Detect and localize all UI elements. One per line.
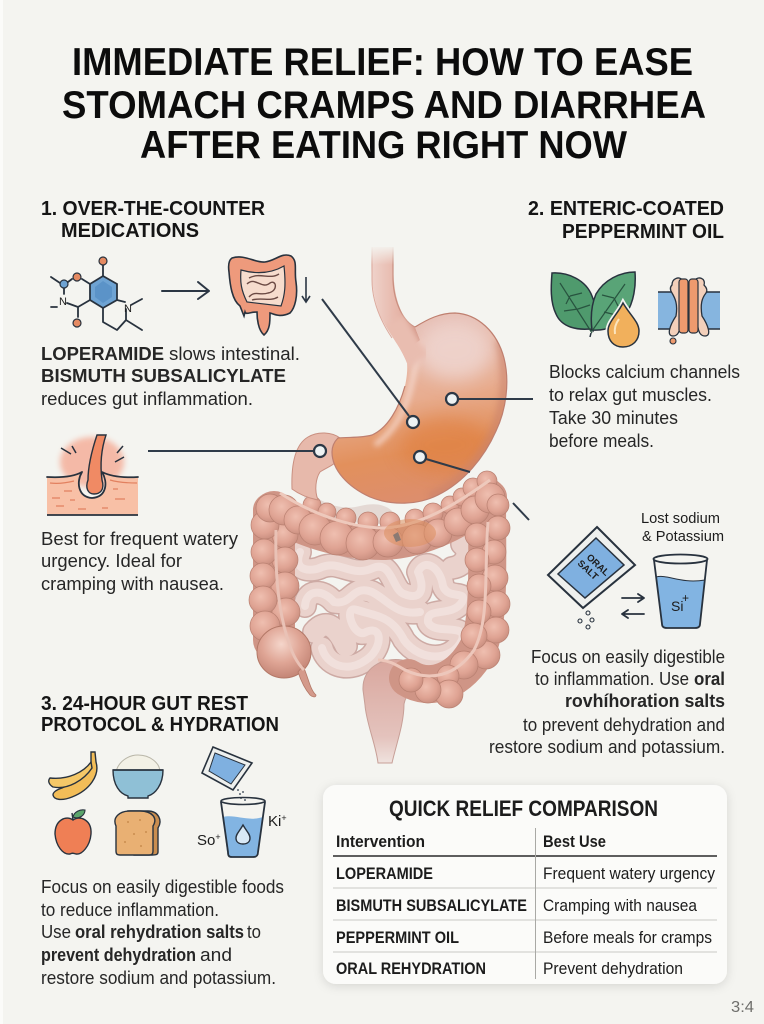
icon: water glass with ions [197, 798, 287, 857]
description: BISMUTH SUBSALICYLATE [41, 365, 286, 386]
panel: over-the-counter medications [41, 197, 310, 594]
icon: water glass with ions: + [281, 813, 287, 823]
description: rovhíhoration salts [565, 690, 725, 711]
icon: molecule: N [59, 296, 67, 308]
label: lost electrolytes: & Potassium [642, 528, 724, 545]
description: reduces gut inflammation. [41, 388, 253, 409]
label: lost electrolytes: Lost sodium [641, 510, 720, 527]
description: Focus on easily digestible foods [41, 876, 284, 897]
table header: Best Use [543, 832, 606, 851]
icon: bread [115, 811, 160, 855]
arrow [162, 282, 209, 299]
duodenum and stomach [292, 245, 507, 503]
description [41, 343, 300, 409]
rectum [363, 660, 432, 763]
label: lost electrolytes [641, 510, 724, 545]
description [489, 646, 725, 757]
table rows: PEPPERMINT OIL [336, 928, 459, 947]
description: restore sodium and potassium. [489, 736, 725, 757]
description: to prevent dehydration and [523, 714, 725, 735]
title: STOMACH CRAMPS AND DIARRHEA [62, 84, 706, 127]
usage text: urgency. Ideal for [41, 550, 182, 571]
table header [336, 832, 606, 851]
title: IMMEDIATE RELIEF: HOW TO EASE [72, 41, 693, 84]
icon: oral salt sachet: SALT [575, 558, 600, 583]
heading: section 1: MEDICATIONS [61, 219, 199, 242]
panel: oral salts [489, 510, 725, 757]
icon: calcium channel [658, 278, 720, 344]
icon: oral salt sachet [548, 527, 635, 629]
table rows: ORAL REHYDRATION [336, 959, 486, 978]
description: to relax gut muscles. [549, 384, 712, 405]
description: to reduce inflammation. [41, 899, 219, 920]
description: oral rehydration salts [75, 921, 244, 942]
table title: QUICK RELIEF COMPARISON [389, 796, 658, 821]
heading: section 1 [41, 197, 265, 242]
ascending colon [249, 511, 316, 697]
description: slows intestinal. [169, 343, 300, 364]
table rows: Prevent dehydration [543, 959, 683, 978]
descending colon [378, 494, 510, 708]
description: Use [41, 921, 71, 942]
panel: quick relief comparison table [323, 785, 727, 984]
description [41, 876, 284, 988]
description: to inflammation. Use [535, 668, 689, 689]
icon: water glass with ions: So [197, 832, 215, 849]
description: Take 30 minutes [549, 407, 678, 428]
description: Blocks calcium channels [549, 361, 740, 382]
usage text: Best for frequent watery [41, 528, 239, 549]
icon: salt sachet pouring [202, 747, 252, 801]
icon: bananas [49, 752, 97, 799]
icon: water glass with ions: + [215, 832, 221, 842]
usage text: cramping with nausea. [41, 573, 224, 594]
description: LOPERAMIDE [41, 343, 164, 364]
heading: section 2: PEPPERMINT OIL [562, 220, 724, 243]
table rows: BISMUTH SUBSALICYLATE [336, 896, 527, 915]
description: restore sodium and potassium. [41, 967, 276, 988]
colon [249, 471, 510, 708]
icon: oral salt sachet: ORAL [584, 552, 611, 579]
icon: glass of water: Si [671, 598, 683, 614]
icon: irritated skin [47, 435, 138, 515]
table rows [336, 864, 715, 978]
heading: section 2: 2. ENTERIC-COATED [528, 197, 724, 220]
heading: section 3 [41, 692, 279, 736]
description: Focus on easily digestible [531, 646, 725, 667]
heading: section 1: 1. OVER-THE-COUNTER [41, 197, 265, 220]
mesentery shadow [300, 480, 400, 525]
aspect ratio note: 3:4 [731, 999, 754, 1016]
icon: peppermint leaves and oil drop [551, 272, 639, 347]
table rows: Before meals for cramps [543, 928, 712, 947]
title: AFTER EATING RIGHT NOW [140, 124, 627, 167]
icon: slowed intestine [229, 255, 310, 335]
description: oral [694, 668, 725, 689]
description: before meals. [549, 430, 654, 451]
icon: apple [55, 810, 91, 854]
description: prevent dehydration [41, 944, 196, 965]
heading: section 3: PROTOCOL & HYDRATION [41, 713, 279, 736]
icon: rice bowl [113, 755, 163, 798]
icon: glass of water [654, 554, 708, 628]
colon backing band [270, 497, 490, 684]
icon: water glass with ions: Ki [268, 813, 281, 830]
icon: molecule: N [124, 303, 132, 315]
callout lines and markers [148, 299, 533, 520]
transverse colon [256, 471, 505, 560]
small intestine [298, 544, 467, 667]
panel: enteric-coated peppermint oil [528, 197, 740, 451]
description: to [247, 921, 261, 942]
description [549, 361, 740, 451]
heading: section 2 [528, 197, 724, 243]
table header: Intervention [336, 832, 425, 851]
exchange arrows [622, 594, 644, 618]
table grid [333, 828, 717, 979]
description: and [200, 944, 232, 965]
icon: glass of water: + [682, 591, 689, 605]
table rows: Cramping with nausea [543, 896, 697, 915]
heading: section 3: 3. 24-HOUR GUT REST [41, 692, 248, 715]
title [62, 41, 706, 167]
central anatomy illustration [249, 245, 510, 763]
usage text [41, 528, 239, 594]
table rows: LOPERAMIDE [336, 864, 433, 883]
table rows: Frequent watery urgency [543, 864, 715, 883]
icon: molecule [51, 257, 142, 330]
panel: gut rest protocol [41, 692, 287, 988]
